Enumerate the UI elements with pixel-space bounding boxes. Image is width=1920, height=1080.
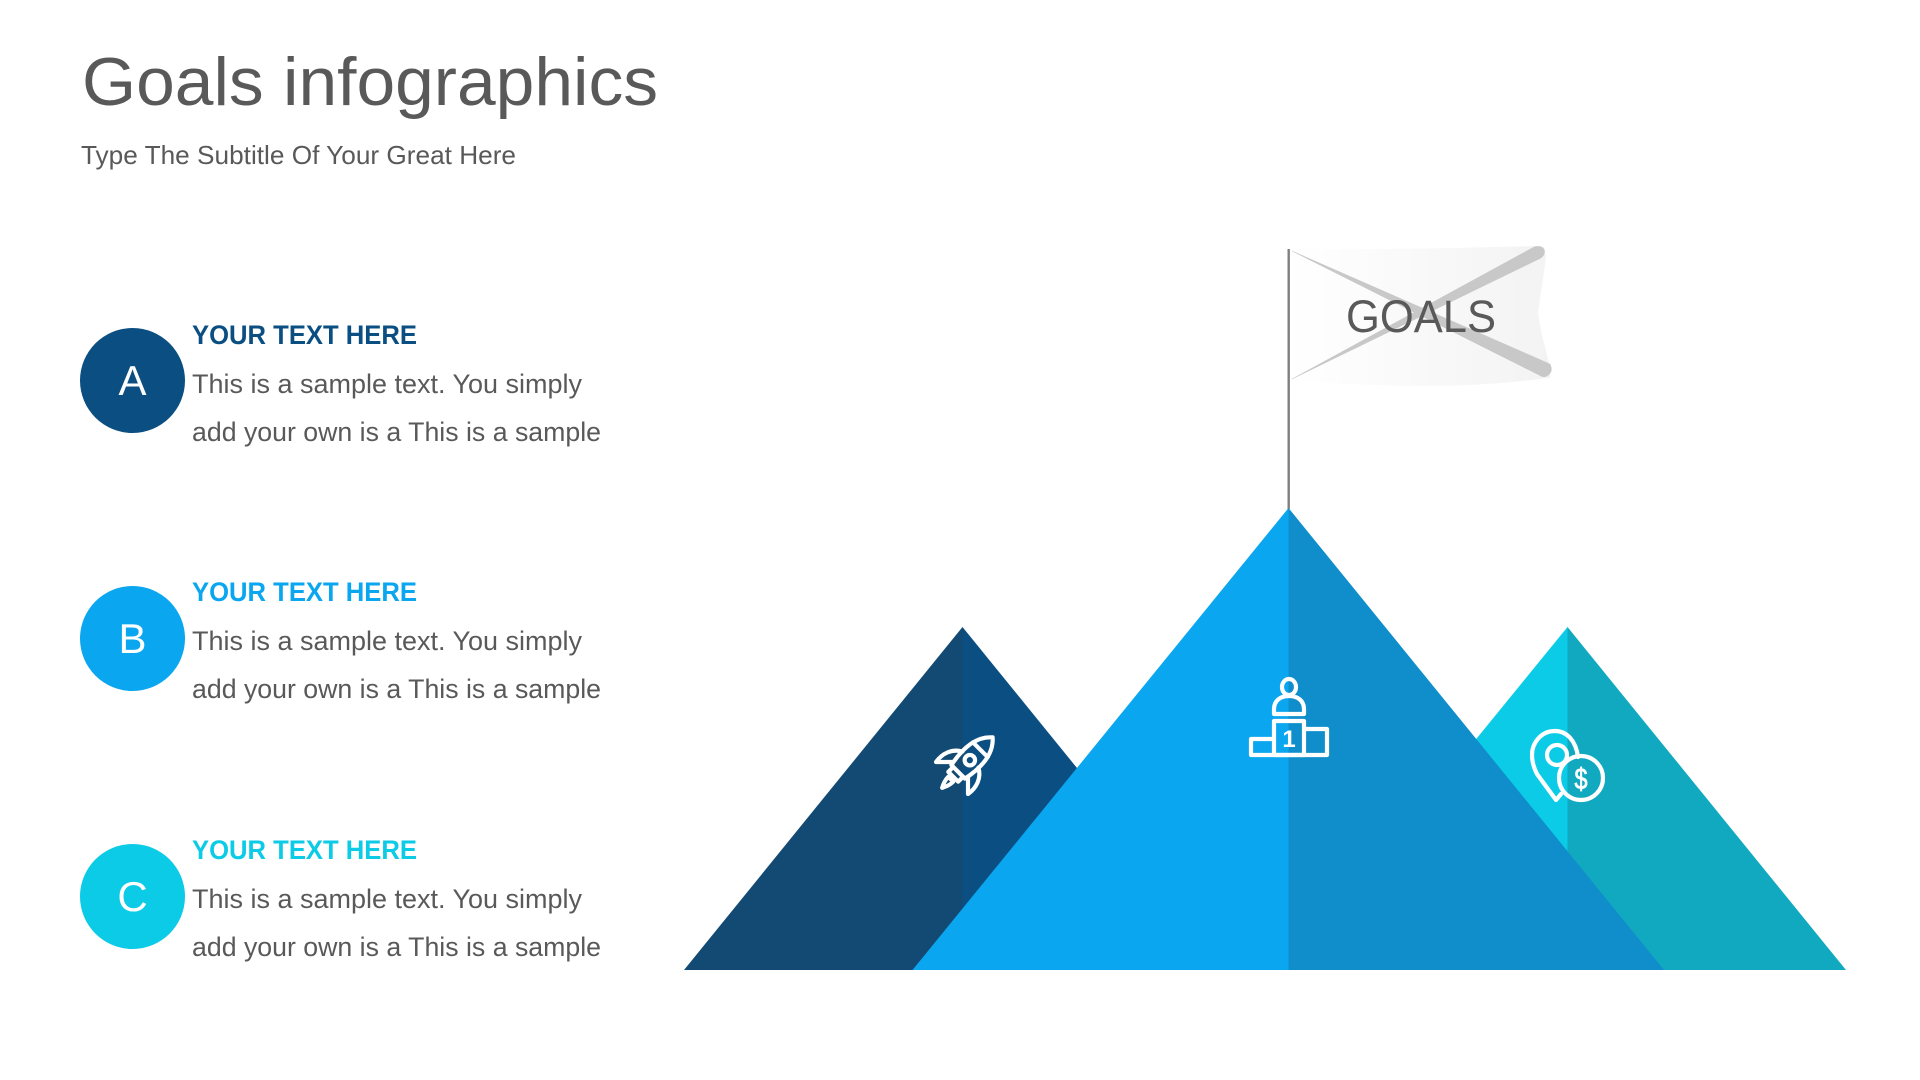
dollar sign: $ (1574, 763, 1588, 796)
body C: This is a sample text. You simply (192, 884, 582, 914)
mountain center (912, 508, 1664, 970)
circle B (80, 586, 185, 691)
subtitle: Type The Subtitle Of Your Great Here (81, 140, 516, 170)
body A (192, 369, 601, 447)
circle C (80, 844, 185, 949)
flag cross (1292, 246, 1551, 379)
circle B: B (118, 615, 147, 662)
item A (80, 320, 601, 447)
body B: This is a sample text. You simply (192, 626, 582, 656)
body B (192, 626, 601, 704)
title: Goals infographics (82, 44, 658, 120)
body A: add your own is a This is a sample (192, 417, 601, 447)
circle C: C (117, 873, 148, 920)
item B (80, 577, 601, 704)
heading A: YOUR TEXT HERE (192, 320, 417, 350)
body B: add your own is a This is a sample (192, 674, 601, 704)
mountain left (684, 627, 1241, 970)
flag (1290, 246, 1551, 386)
flag label: GOALS (1346, 291, 1496, 342)
icon: rocket (926, 721, 1009, 804)
body C: add your own is a This is a sample (192, 932, 601, 962)
item C (80, 835, 601, 962)
circle A (80, 328, 185, 433)
icon: location and dollar (1532, 731, 1603, 800)
mountain right (1288, 627, 1846, 970)
podium number: 1 (1282, 726, 1296, 753)
flag pole (1288, 249, 1290, 509)
icon: podium (1251, 679, 1327, 755)
heading B: YOUR TEXT HERE (192, 577, 417, 607)
body A: This is a sample text. You simply (192, 369, 582, 399)
heading C: YOUR TEXT HERE (192, 835, 417, 865)
circle A: A (118, 357, 147, 404)
body C (192, 884, 601, 962)
